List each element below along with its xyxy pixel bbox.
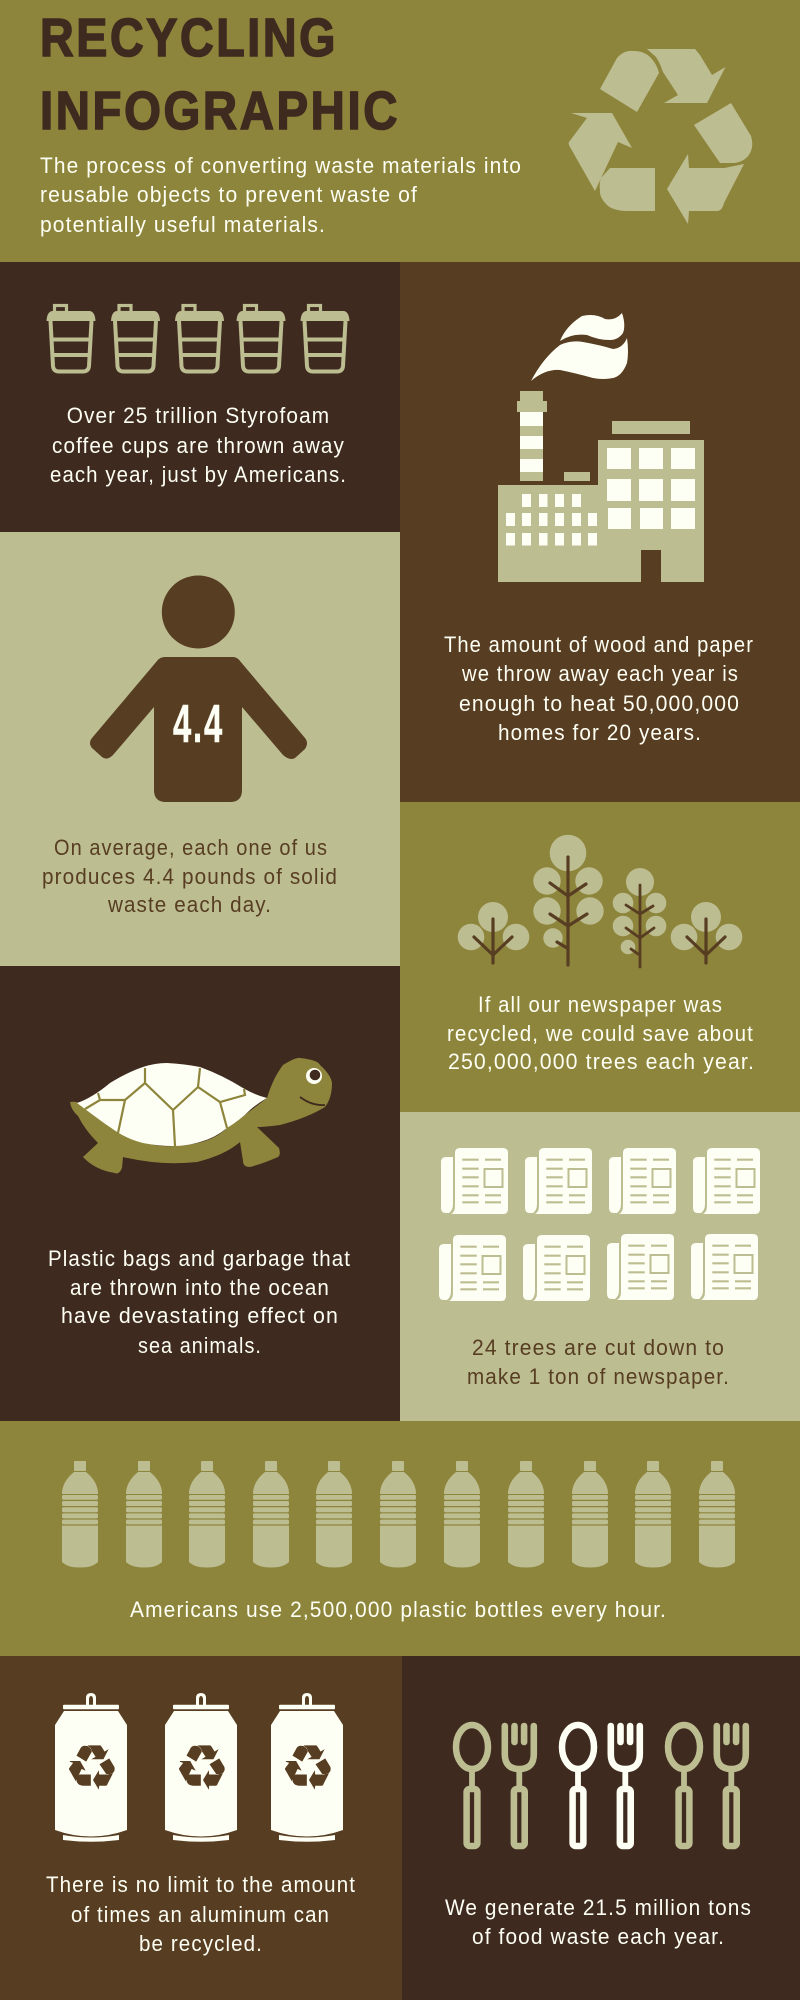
text: introduction: reusable objects to prevent waste of	[40, 182, 418, 207]
text: coffee cups fact	[50, 403, 347, 487]
text: aluminum cans fact: There is no limit to the amount	[46, 1872, 356, 1897]
text: wood and paper fact	[444, 632, 754, 745]
icon: person with number	[90, 576, 307, 802]
text: solid waste fact: waste each day.	[107, 892, 272, 917]
text: solid waste fact: On average, each one of us	[54, 835, 328, 860]
text: food waste fact	[445, 1895, 752, 1949]
panel: sea animals	[0, 966, 400, 1422]
text: sea animals fact	[48, 1246, 351, 1358]
icon: spoons and forks	[456, 1725, 746, 1846]
text: sea animals fact: Plastic bags and garbage that	[48, 1246, 351, 1271]
icon: eight newspapers	[439, 1148, 760, 1301]
text: sea animals fact: sea animals.	[138, 1333, 262, 1358]
text: introduction: potentially useful materials.	[40, 212, 326, 237]
text: wood and paper fact: enough to heat 50,000,000	[459, 691, 740, 716]
panel: aluminum cans	[0, 1656, 402, 2000]
text: wood and paper fact: we throw away each year is	[461, 661, 739, 686]
text: solid waste fact: produces 4.4 pounds of solid	[42, 864, 338, 889]
text: newspaper fact: make 1 ton of newspaper.	[467, 1364, 730, 1389]
icon: row of eleven bottles	[62, 1461, 735, 1568]
text: food waste fact: of food waste each year.	[472, 1924, 725, 1949]
text: coffee cups fact: Over 25 trillion Styrofoam	[67, 403, 330, 428]
title: INFOGRAPHIC	[40, 81, 400, 141]
text: newspaper recycling fact: recycled, we could save about	[447, 1021, 754, 1046]
icon: recycling symbol	[569, 49, 752, 224]
text: coffee cups fact: coffee cups are thrown away	[52, 433, 345, 458]
panel: header	[0, 0, 800, 262]
text: sea animals fact: have devastating effect on	[61, 1303, 339, 1328]
text: newspaper fact	[467, 1335, 730, 1389]
text: wood and paper fact: The amount of wood and paper	[444, 632, 754, 657]
icon: five coffee cups	[46, 306, 350, 372]
text: aluminum cans fact: be recycled.	[139, 1931, 263, 1956]
panel: trees	[400, 802, 800, 1112]
text: newspaper recycling fact: If all our newspaper was	[478, 992, 723, 1017]
text: aluminum cans fact: of times an aluminum can	[71, 1902, 330, 1927]
text: coffee cups fact: each year, just by Americans.	[50, 462, 347, 487]
text: introduction: The process of converting waste materials into	[40, 153, 522, 178]
icon: three recycling cans	[55, 1693, 343, 1842]
text: sea animals fact: are thrown into the ocean	[70, 1275, 330, 1300]
panel: solid waste per person	[0, 532, 400, 966]
text: food waste fact: We generate 21.5 million tons	[445, 1895, 752, 1920]
icon: four trees	[458, 835, 742, 967]
text: newspaper fact: 24 trees are cut down to	[472, 1335, 725, 1360]
panel: coffee cups	[0, 262, 400, 532]
text: wood and paper fact: homes for 20 years.	[498, 720, 702, 745]
text: newspaper recycling fact	[447, 992, 755, 1074]
text: introduction	[40, 153, 522, 237]
icon: turtle	[70, 1058, 332, 1173]
panel: factory	[400, 262, 800, 802]
panel: plastic bottles	[0, 1421, 800, 1656]
text: solid waste fact	[42, 835, 338, 917]
panel: newspapers	[400, 1112, 800, 1421]
text: plastic bottles fact: Americans use 2,500,000 plastic bottles every hour.	[130, 1597, 667, 1622]
icon: factory with smoke	[498, 313, 704, 582]
title: RECYCLING	[40, 8, 338, 68]
text: aluminum cans fact	[46, 1872, 356, 1956]
title	[40, 8, 400, 141]
icon: person with number: 4.4	[173, 694, 224, 754]
text: newspaper recycling fact: 250,000,000 trees each year.	[448, 1049, 755, 1074]
panel: food waste	[402, 1656, 800, 2000]
